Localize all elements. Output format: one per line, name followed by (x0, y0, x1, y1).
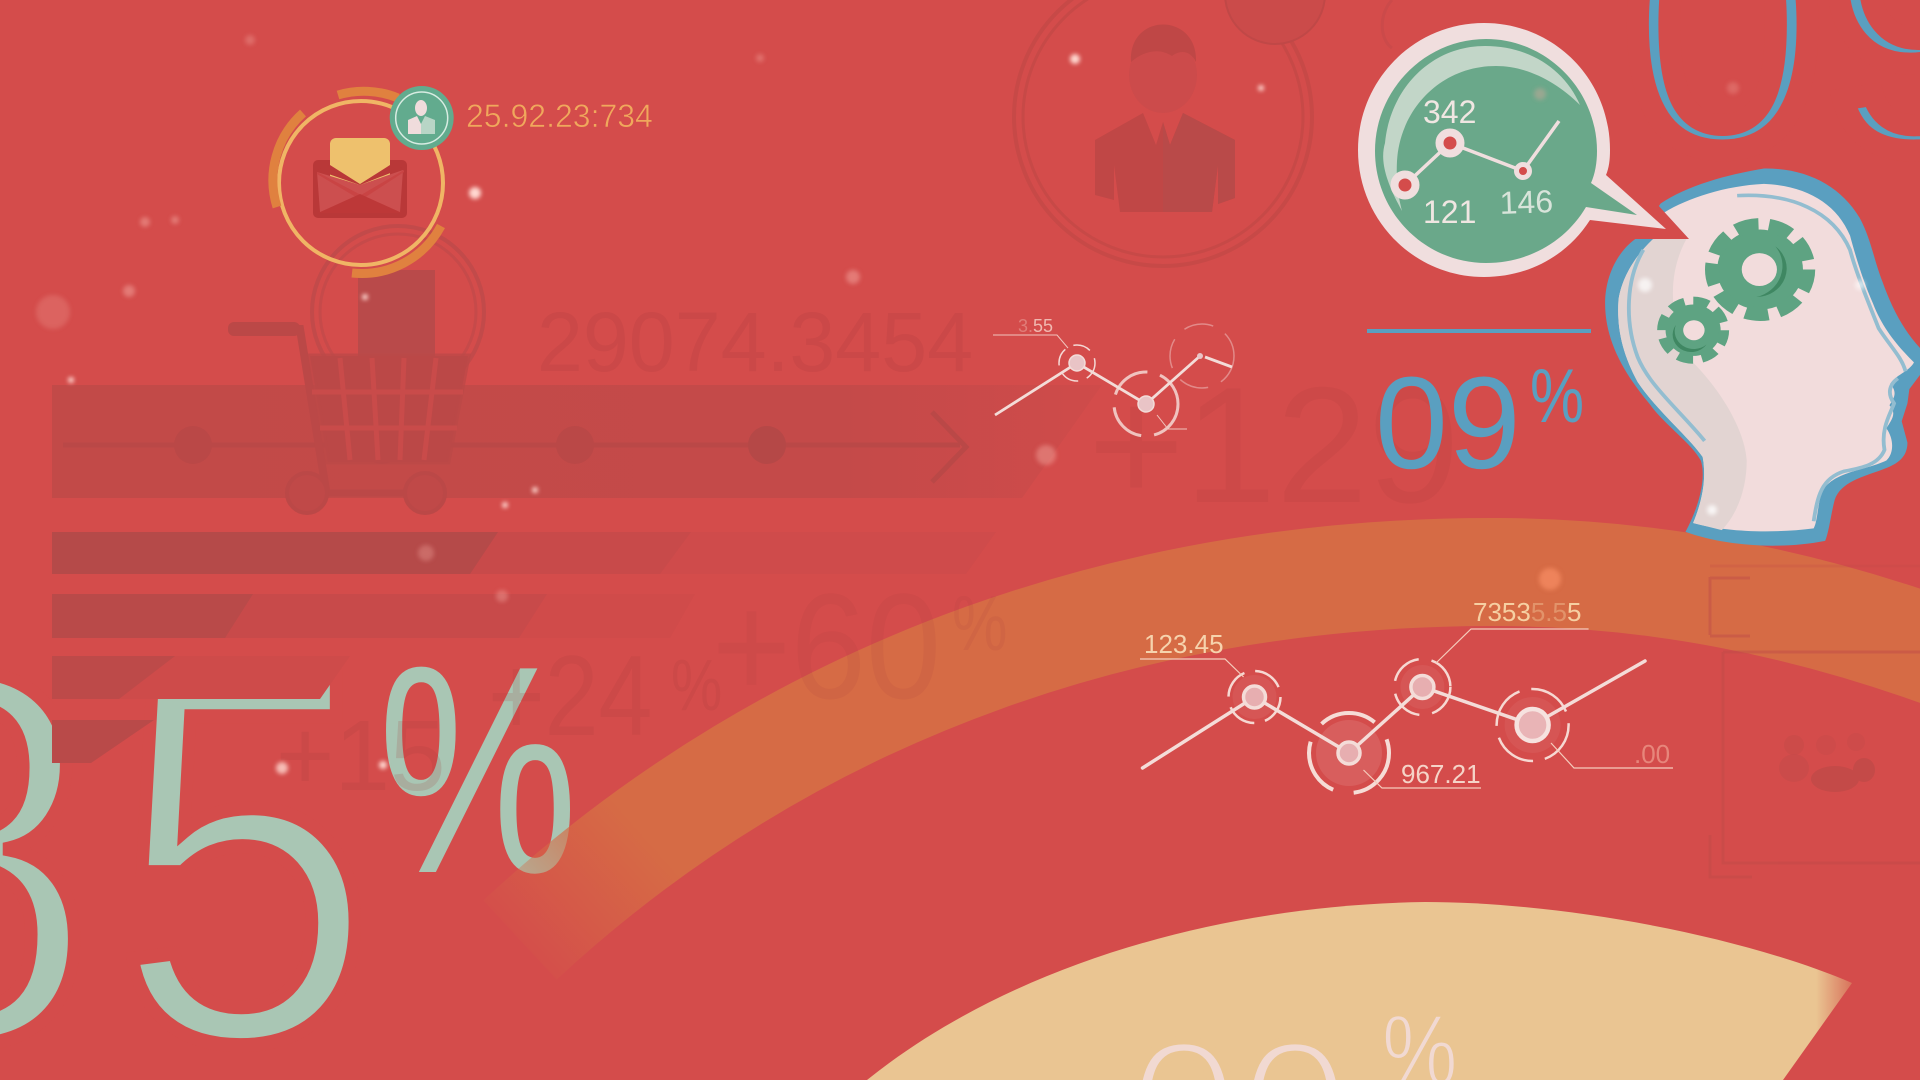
head accent lines (1629, 195, 1906, 521)
label: 3.55 (1018, 316, 1053, 336)
head with gears (1605, 168, 1920, 546)
faded balloon rings top (1225, 0, 1392, 48)
orange ring arcs (273, 91, 441, 274)
faded number +60%: +60 (712, 563, 941, 731)
floating particles (36, 35, 1865, 774)
faded people cluster (1779, 733, 1875, 792)
faded number +24%: +24 (488, 633, 652, 760)
leaders (1140, 629, 1673, 788)
faded number +15%: +15 (276, 700, 446, 812)
faded circle with lamp behind cart (312, 226, 484, 398)
blue percentage 09%: 09 (1375, 349, 1521, 496)
value 146: 146 (1499, 183, 1554, 221)
dashed rings (1059, 324, 1234, 436)
orange arc band (520, 572, 1920, 940)
faded frame lower right (1710, 566, 1920, 877)
small gear (1663, 302, 1724, 359)
faded number 29074.3454: 29074.3454 (537, 295, 973, 389)
label 123.45: 123.45 (1144, 629, 1224, 659)
bubble highlight (1383, 46, 1580, 211)
speech bubble chart (1358, 23, 1666, 277)
blue percentage 09%: % (1530, 354, 1584, 439)
faint dashed small line chart (993, 316, 1234, 436)
value 342: 342 (1423, 94, 1476, 130)
large digits 85 (0, 562, 374, 1080)
head fill (1618, 184, 1914, 531)
halos and dashed rings (1228, 659, 1569, 793)
beige arc shape (867, 902, 1852, 1080)
nodes (1069, 355, 1085, 371)
faded number +24%: % (671, 645, 722, 725)
person badge (390, 86, 454, 150)
bubble nodes (1394, 132, 1530, 196)
head outline (1605, 168, 1920, 546)
envelope icon with ring (273, 86, 454, 274)
leaders (993, 335, 1068, 348)
label .00: .00 (1634, 739, 1670, 769)
timestamp 25.92.23:734: 25.92.23:734 (466, 98, 653, 134)
red wedge between bubble and head (1622, 204, 1689, 239)
bubble line (1405, 121, 1559, 185)
head shadow (1618, 237, 1747, 530)
faded shopping cart icon (228, 322, 468, 513)
faded number +129: +129 (1088, 353, 1460, 537)
nodes (1244, 686, 1266, 708)
ring (279, 101, 443, 265)
large gear (1712, 225, 1808, 314)
bubble outer (1358, 23, 1666, 277)
faded person icon in circle (1014, 0, 1312, 266)
large percent sign: % (378, 604, 578, 935)
blue percentage 09% (1375, 349, 1584, 496)
label 73535.55: 73535.55 (1473, 597, 1581, 627)
bubble inner (1375, 39, 1637, 263)
blue divider (1367, 329, 1591, 333)
faded arrow bar with timeline (52, 385, 1102, 498)
line (995, 356, 1200, 415)
faded number 00% on beige (1128, 994, 1458, 1080)
value 121: 121 (1423, 194, 1476, 230)
faded progress bars (52, 532, 996, 763)
line (1142, 661, 1645, 768)
envelope (313, 138, 407, 218)
large line chart (1140, 597, 1673, 793)
label 967.21: 967.21 (1401, 759, 1481, 789)
faded number +60%: % (952, 579, 1007, 667)
